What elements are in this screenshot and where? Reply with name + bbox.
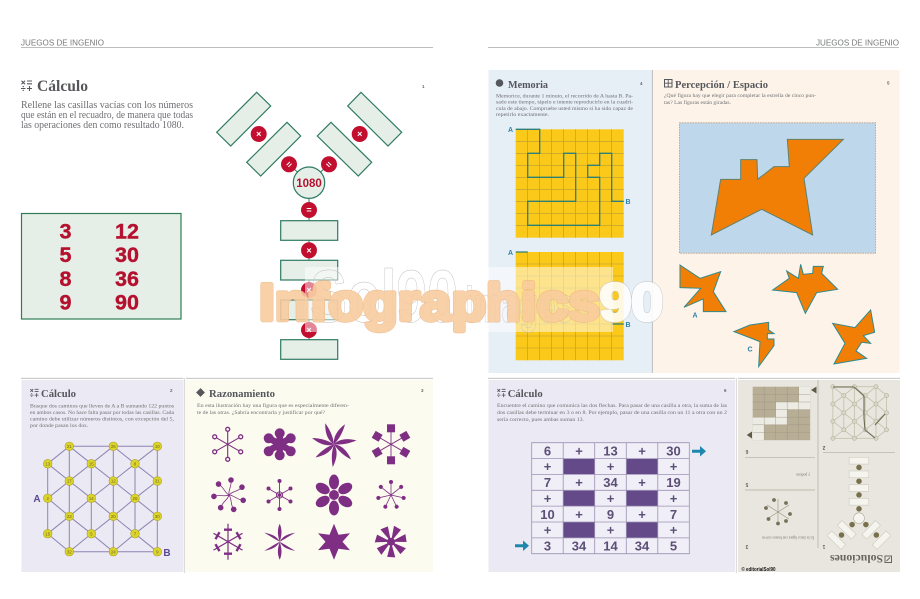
instructions: dos casillas debe terminar en 3 o en 8. Por ejemplo, pasar de una casilla con un 11 a otra con un 2 — [497, 410, 727, 416]
number network: B — [163, 548, 171, 559]
icon: solutions check — [885, 556, 892, 562]
number network: 32 — [67, 549, 72, 554]
instructions: en ambos casos. No hace falta pasar por todas las casillas. Cada — [30, 409, 175, 416]
number table: + — [638, 475, 646, 490]
figure 2 — [264, 428, 296, 460]
upside-down labels: 2 — [822, 444, 825, 450]
number box: 12 — [115, 220, 139, 244]
figure 12 — [373, 524, 410, 560]
icon: dot — [496, 79, 503, 87]
page number 6: 6 — [724, 388, 727, 393]
top grid with route — [508, 127, 631, 238]
number network: 15 — [45, 531, 51, 536]
operations diagram: × — [357, 129, 362, 139]
operations diagram: × — [306, 246, 312, 256]
page number 5: 5 — [887, 80, 890, 86]
heading: Razonamiento — [209, 388, 275, 400]
number network: 24 — [111, 549, 116, 554]
operations diagram: × — [306, 325, 312, 335]
instructions — [30, 404, 175, 429]
number table: 19 — [666, 475, 681, 490]
bottom empty grid: B — [625, 322, 631, 329]
heading: Cálculo — [508, 388, 543, 400]
number network: 23 — [67, 514, 72, 519]
number network: 26 — [133, 496, 138, 501]
icon: calculo symbols — [30, 389, 39, 397]
number table: 7 — [544, 475, 551, 490]
figure 5 — [211, 477, 247, 513]
instructions: las operaciones den como resultado 1080. — [21, 120, 184, 131]
number network: 12 — [111, 479, 116, 484]
number network: A — [33, 494, 41, 505]
number table: 30 — [666, 444, 681, 458]
number table: 7 — [670, 507, 677, 522]
number table: 34 — [635, 538, 650, 554]
number table: + — [670, 522, 678, 538]
number table — [532, 443, 689, 554]
number table: 6 — [544, 444, 551, 458]
number network: 14 — [89, 496, 94, 501]
icon: diamond — [198, 390, 204, 396]
heading: Cálculo — [41, 388, 76, 400]
option A — [680, 265, 726, 320]
number box: 90 — [115, 290, 139, 314]
panel: calculo 1 — [21, 78, 425, 359]
panel: calculo 2 — [21, 378, 184, 572]
number network: 30 — [155, 514, 160, 519]
heading: Memoria — [508, 79, 548, 91]
number box: 36 — [115, 267, 139, 291]
page number 2: 2 — [170, 388, 173, 393]
page number 1: 1 — [422, 84, 425, 89]
operations diagram — [217, 92, 402, 359]
figure 11 — [318, 524, 350, 560]
heading: soluciones upside down: Soluciones — [829, 552, 883, 564]
number box: 8 — [60, 267, 72, 291]
figure 4 — [372, 424, 410, 464]
arrow: entry — [515, 540, 529, 551]
number table: 14 — [603, 538, 618, 554]
number table: + — [638, 444, 646, 458]
heading: Percepción / Espacio — [675, 79, 768, 91]
number network: 7 — [134, 531, 137, 536]
number table: + — [544, 522, 552, 538]
number table: + — [544, 459, 552, 474]
panel: calculo 6 — [488, 378, 736, 573]
number table: + — [607, 491, 615, 506]
number table: 13 — [603, 444, 618, 458]
icon: dice — [664, 80, 672, 87]
instructions — [21, 100, 193, 131]
heading: calculo: Cálculo — [37, 78, 88, 95]
solution 1 mini diagram — [827, 457, 891, 549]
operations diagram: = — [323, 159, 334, 170]
instructions — [197, 402, 349, 416]
publisher credit: © editorialSol90 — [742, 566, 776, 573]
panel: memoria — [488, 70, 652, 373]
instructions: En esta ilustración hay una figura que es especialmente diferen- — [197, 402, 349, 409]
number table: 5 — [670, 538, 677, 554]
watermark — [259, 255, 663, 338]
solution 6 mini table — [747, 386, 816, 440]
watermark: Sol90 — [310, 255, 458, 338]
upside-down labels: 5 — [745, 481, 748, 487]
instructions: Encuentre el camino que comunica las dos flechas. Para pasar de una casilla a otra, la suma de las — [497, 402, 727, 409]
figure 1 — [213, 427, 243, 461]
number table: + — [544, 491, 552, 506]
icon: calculo symbols — [21, 81, 32, 91]
solution 3 text: Es la única figura con brazos curvos — [761, 536, 814, 540]
instructions: sería correcto, pues ambas suman 13. — [497, 417, 585, 423]
watermark: images — [465, 277, 573, 333]
number table: + — [670, 459, 678, 474]
instructions: tas? Las figuras están giradas. — [664, 99, 732, 106]
number table: 10 — [540, 507, 555, 522]
bottom empty grid: A — [508, 250, 513, 257]
panel: percepcion espacio — [653, 70, 900, 373]
top grid with route: A — [508, 127, 513, 134]
number network: 15 — [89, 461, 94, 466]
number network: 8 — [134, 461, 137, 466]
page number 4: 4 — [640, 81, 643, 86]
number table: + — [638, 507, 646, 522]
operations diagram: = — [306, 205, 312, 215]
instructions: te de las otras. ¿Sabría encontrarla y justificar por qué? — [197, 409, 326, 416]
operations diagram: × — [256, 129, 261, 139]
figure 8 — [376, 480, 406, 509]
divider lines — [745, 380, 895, 548]
number network: 31 — [155, 479, 160, 484]
upside-down labels: 6 — [745, 448, 748, 454]
number network: 10 — [155, 444, 160, 449]
panel: soluciones — [738, 378, 900, 573]
number box: 3 — [60, 220, 72, 244]
operations diagram: = — [284, 159, 295, 170]
instructions: repetirlo exactamente. — [496, 112, 550, 118]
number table: + — [575, 475, 583, 490]
instructions: camino debe utilizar números distintos, con excepción del 5, — [30, 416, 175, 422]
option C — [734, 322, 774, 367]
instructions: cula de abajo. Compruebe usted mismo si ha sido capaz de — [496, 106, 634, 112]
number table: + — [607, 522, 615, 538]
number table: 9 — [607, 507, 614, 522]
number network: 5 — [90, 531, 93, 536]
operations diagram: 1080 — [296, 178, 322, 190]
number box: 9 — [60, 290, 72, 314]
bottom empty grid — [508, 250, 631, 360]
number network — [33, 442, 171, 559]
instructions: que están en el recuadro, de manera que todas — [21, 110, 193, 121]
number network: 17 — [67, 479, 72, 484]
number box: 5 — [60, 243, 72, 267]
number table: + — [575, 507, 583, 522]
option A: A — [692, 312, 698, 320]
instructions: sado este tiempo, tápelo e intente reproducirlo en la cuadrí- — [496, 100, 633, 106]
right page header: JUEGOS DE INGENIO — [816, 38, 899, 48]
number box: 30 — [115, 243, 139, 267]
solution 3 mini figure — [764, 498, 792, 525]
number network: 20 — [111, 514, 116, 519]
figure 3 — [312, 423, 356, 467]
number table: + — [607, 459, 615, 474]
instructions: ¿Qué figura hay que elegir para completar la estrella de cinco pun- — [664, 92, 816, 99]
top grid with route: B — [625, 199, 631, 206]
icon: calculo symbols — [497, 389, 506, 397]
number network: 13 — [45, 461, 51, 466]
figure 6 — [266, 479, 292, 511]
solution 5 answer: y podium — [796, 472, 810, 476]
operations diagram: × — [306, 285, 312, 295]
watermark: Infographics 90 — [259, 274, 663, 332]
arrow: exit — [692, 446, 706, 456]
upside-down labels — [745, 444, 825, 549]
number table: 34 — [603, 475, 618, 490]
number table: + — [670, 491, 678, 506]
option C: C — [747, 346, 753, 354]
option D — [833, 310, 875, 364]
upside-down labels: 3 — [745, 543, 748, 549]
number box — [22, 214, 181, 319]
watermark: Infographics 90 — [259, 274, 663, 332]
option B — [773, 264, 838, 313]
left page header: JUEGOS DE INGENIO — [21, 38, 104, 48]
number network: 2 — [46, 496, 49, 501]
solution 2 mini network — [831, 385, 889, 440]
instructions: Memorice, durante 1 minuto, el recorrido de A hasta B. Pa- — [496, 94, 633, 100]
figures grid — [211, 423, 410, 560]
panel: razonamiento — [185, 378, 433, 573]
figure 7 — [314, 474, 354, 516]
instructions — [496, 94, 634, 118]
instructions: Busque dos caminos que lleven de A a B sumando 122 puntos — [30, 404, 174, 410]
number network: 9 — [156, 549, 159, 554]
upside-down labels: 1 — [822, 543, 825, 549]
instructions — [497, 402, 727, 423]
instructions: Rellene las casillas vacías con los números — [21, 100, 193, 111]
page number 3: 3 — [421, 388, 424, 393]
number table: + — [575, 444, 583, 458]
figure 10 — [264, 524, 295, 560]
number table: 3 — [544, 538, 551, 554]
number network: 25 — [111, 444, 116, 449]
number table: 34 — [572, 538, 587, 554]
blue board with star fragment — [680, 123, 876, 253]
instructions — [664, 92, 816, 106]
instructions: por donde pasan los dos. — [30, 423, 89, 429]
number network: 21 — [67, 444, 72, 449]
figure 9 — [214, 524, 242, 560]
